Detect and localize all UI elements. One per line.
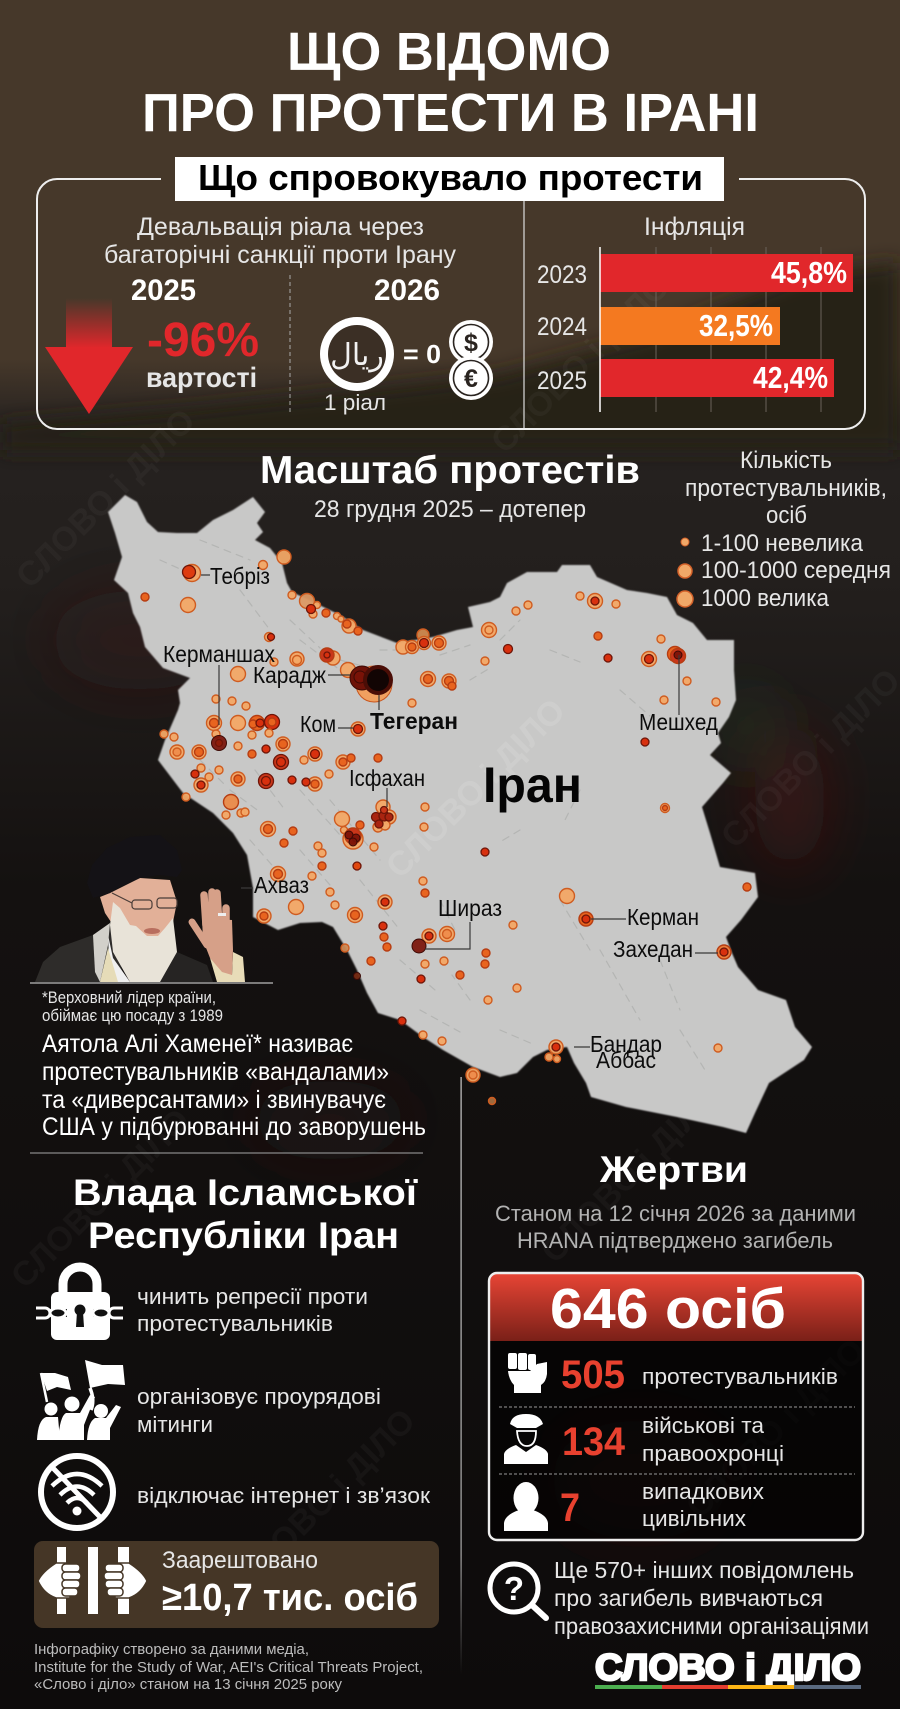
bar chart: inflation: 2025 bbox=[537, 367, 587, 395]
city label: Bandar Abbas: Бандар bbox=[590, 1031, 662, 1057]
text: repression: протестувальників bbox=[137, 1311, 333, 1336]
icon: civilian bbox=[504, 1482, 548, 1531]
city label: Zahedan: Захедан bbox=[613, 936, 693, 962]
text: pro-government rallies: організовує проурядові bbox=[137, 1384, 381, 1409]
city label: Ahvaz: Ахваз bbox=[254, 872, 309, 898]
one rial label: 1 ріал bbox=[324, 390, 386, 415]
portrait: Ayatollah Khamenei bbox=[35, 835, 245, 982]
protest dots: Isfahan and centre bbox=[257, 800, 429, 923]
text: other reports: Ще 570+ інших повідомлень bbox=[554, 1557, 854, 1583]
callout: arrests bbox=[34, 1541, 439, 1628]
watermarks: СЛОВО і ДІЛО bbox=[229, 1402, 423, 1596]
panel: death toll bbox=[489, 1273, 863, 1540]
row: military and law enforcement: 134 bbox=[562, 1420, 626, 1464]
protest dots: northwest bbox=[141, 550, 362, 710]
city label: Karaj: Карадж bbox=[253, 662, 327, 688]
heading: authorities: Влада Ісламської bbox=[73, 1172, 419, 1213]
city label: Tehran: Тегеран bbox=[370, 708, 458, 734]
row: military and law enforcement: правоохронці bbox=[642, 1441, 784, 1466]
row: military and law enforcement bbox=[562, 1413, 784, 1466]
watermarks: СЛОВО і ДІЛО bbox=[679, 1332, 873, 1526]
icon: dollar and euro coins: € bbox=[464, 365, 478, 393]
text block: Khamenei statement bbox=[42, 1030, 426, 1141]
icon: dollar and euro coins: $ bbox=[464, 329, 478, 357]
icon: lock and broken chain bbox=[36, 1267, 123, 1340]
row: civilians bbox=[560, 1479, 764, 1531]
bar chart: inflation: 42,4% bbox=[753, 360, 828, 395]
heading: authorities bbox=[73, 1172, 419, 1256]
bar chart: inflation: 45,8% bbox=[771, 255, 847, 290]
text: other reports: про загибель вивчаються bbox=[554, 1585, 823, 1611]
watermarks: СЛОВО і ДІЛО bbox=[4, 1102, 198, 1296]
bar chart: inflation: 2024 bbox=[537, 313, 587, 341]
watermark on map: СЛОВО і ДІЛО bbox=[379, 692, 573, 886]
icon: magnifier with question mark: ? bbox=[504, 1570, 524, 1607]
title: ПРО ПРОТЕСТИ В ІРАНІ bbox=[142, 83, 759, 143]
value label: вартості bbox=[146, 362, 257, 393]
city label: Kerman: Керман bbox=[627, 904, 699, 930]
text: other reports: правозахисними організаціями bbox=[554, 1613, 869, 1639]
minus 96 percent: -96% bbox=[147, 314, 259, 367]
bar chart: inflation bbox=[537, 213, 853, 412]
city label: Qom: Ком bbox=[300, 711, 336, 737]
watermarks bbox=[4, 267, 900, 1596]
year 2026: 2026 bbox=[374, 274, 440, 307]
title bbox=[142, 22, 759, 143]
text: repression: чинить репресії проти bbox=[137, 1284, 368, 1309]
text: HRANA note bbox=[495, 1201, 856, 1253]
text block: Khamenei statement: протестувальників «вандалами» bbox=[42, 1058, 389, 1086]
text block: Khamenei statement: Аятола Алі Хаменеї* називає bbox=[42, 1030, 353, 1058]
leader lines bbox=[201, 575, 718, 1047]
title: ЩО ВІДОМО bbox=[287, 22, 611, 82]
source note: Інфографіку створено за даними медіа, bbox=[34, 1641, 309, 1658]
heading: scale of protests: 28 грудня 2025 – дотепер bbox=[314, 496, 586, 523]
watermarks: СЛОВО і ДІЛО bbox=[9, 402, 203, 596]
footnote: supreme leader bbox=[42, 988, 223, 1025]
header band: 646 осіб bbox=[550, 1277, 786, 1341]
row: civilians: цивільних bbox=[642, 1506, 746, 1531]
icon: no wifi bbox=[41, 1456, 113, 1528]
panel heading: Що спровокувало протести bbox=[198, 157, 703, 198]
city label: Shiraz: Шираз bbox=[438, 895, 502, 921]
heading: victims: Жертви bbox=[599, 1149, 748, 1190]
row: protesters: 505 bbox=[561, 1353, 625, 1397]
row: protesters bbox=[561, 1353, 838, 1397]
map terrain texture bbox=[160, 540, 705, 1070]
city label: Bandar Abbas: Аббас bbox=[596, 1047, 656, 1073]
source note: «Слово і діло» станом на 13 січня 2025 року bbox=[34, 1676, 342, 1693]
protest dots: south and east bbox=[341, 848, 751, 1104]
legend: number of protesters: протестувальників, bbox=[685, 475, 887, 502]
text: HRANA note: Станом на 12 січня 2026 за даними bbox=[495, 1201, 856, 1226]
heading: scale of protests: Масштаб протестів bbox=[260, 449, 640, 492]
city label: Kermanshah: Керманшах bbox=[163, 641, 275, 667]
icon: magnifier with question mark bbox=[490, 1564, 546, 1618]
legend: number of protesters bbox=[677, 447, 891, 612]
text block: Khamenei statement: США у підбурюванні до заворушень bbox=[42, 1113, 426, 1141]
source note bbox=[34, 1641, 423, 1693]
icon: people with flags bbox=[37, 1360, 125, 1440]
heading: scale of protests bbox=[260, 449, 640, 523]
icon: raised fist bbox=[508, 1353, 547, 1393]
legend: number of protesters: 1000 велика bbox=[701, 585, 830, 612]
city label: Mashhad: Мешхед bbox=[639, 709, 719, 735]
legend: number of protesters: осіб bbox=[766, 502, 807, 529]
footnote: supreme leader: *Верховний лідер країни, bbox=[42, 988, 216, 1007]
protest dots: Tehran and Karaj cluster bbox=[350, 665, 393, 702]
legend: number of protesters: Кількість bbox=[740, 447, 832, 474]
bar chart: inflation: 2023 bbox=[537, 261, 587, 289]
icon: dollar and euro coins bbox=[449, 320, 493, 400]
legend: number of protesters: 100-1000 середня bbox=[701, 557, 891, 584]
icon: hands on prison bars bbox=[38, 1547, 147, 1614]
text block: Khamenei statement: та «диверсантами» і звинувачує bbox=[42, 1086, 386, 1114]
protest dots: north and northeast bbox=[396, 592, 720, 812]
devaluation text: Девальвація ріала через bbox=[137, 213, 424, 241]
bar chart: inflation: Інфляція bbox=[644, 213, 745, 241]
devaluation text: багаторічні санкції проти Ірану bbox=[104, 241, 456, 269]
watermarks: СЛОВО і ДІЛО bbox=[484, 267, 678, 461]
row: protesters: протестувальників bbox=[642, 1364, 838, 1389]
logo: Slovo i Dilo: СЛОВО і ДІЛО bbox=[595, 1647, 861, 1688]
year 2025: 2025 bbox=[131, 274, 196, 307]
heading: authorities: Республіки Іран bbox=[88, 1215, 399, 1256]
icon: rial coin: ريال bbox=[330, 339, 384, 372]
devaluation text bbox=[104, 213, 456, 269]
bar chart: inflation: 32,5% bbox=[699, 308, 773, 343]
country label: Iran: Іран bbox=[483, 757, 582, 813]
text: HRANA note: HRANA підтверджено загибель bbox=[517, 1228, 833, 1253]
text: internet shutdown: відключає інтернет і зв’язок bbox=[137, 1483, 430, 1508]
equals zero: = 0 bbox=[403, 339, 441, 369]
text: other reports bbox=[554, 1557, 869, 1639]
text: pro-government rallies bbox=[137, 1384, 381, 1437]
row: civilians: 7 bbox=[560, 1486, 580, 1530]
icon: officer bbox=[504, 1414, 548, 1464]
arrests number: ≥10,7 тис. осіб bbox=[162, 1577, 418, 1619]
city label: Tabriz: Тебріз bbox=[210, 563, 270, 589]
icon: rial coin bbox=[320, 317, 394, 391]
footnote: supreme leader: обіймає цю посаду з 1989 bbox=[42, 1006, 223, 1025]
text: repression bbox=[137, 1284, 368, 1336]
header band bbox=[489, 1273, 863, 1341]
row: military and law enforcement: військові та bbox=[642, 1413, 765, 1438]
arrests label: Заарештовано bbox=[162, 1547, 318, 1574]
text: pro-government rallies: мітинги bbox=[137, 1412, 213, 1437]
city label: Isfahan: Ісфахан bbox=[349, 765, 425, 791]
panel: what provoked the protests bbox=[37, 157, 865, 429]
legend: number of protesters: 1-100 невелика bbox=[701, 530, 864, 557]
icon: red down arrow bbox=[45, 298, 133, 414]
row: civilians: випадкових bbox=[642, 1479, 764, 1504]
source note: Institute for the Study of War, AEI's Critical Threats Project, bbox=[34, 1659, 423, 1676]
watermarks: СЛОВО і ДІЛО bbox=[534, 1077, 728, 1271]
map outline bbox=[108, 495, 812, 1133]
protest dots: west bbox=[160, 714, 382, 819]
city label: Bandar Abbas bbox=[590, 1031, 662, 1073]
map of Iran with protest dots bbox=[108, 495, 812, 1133]
